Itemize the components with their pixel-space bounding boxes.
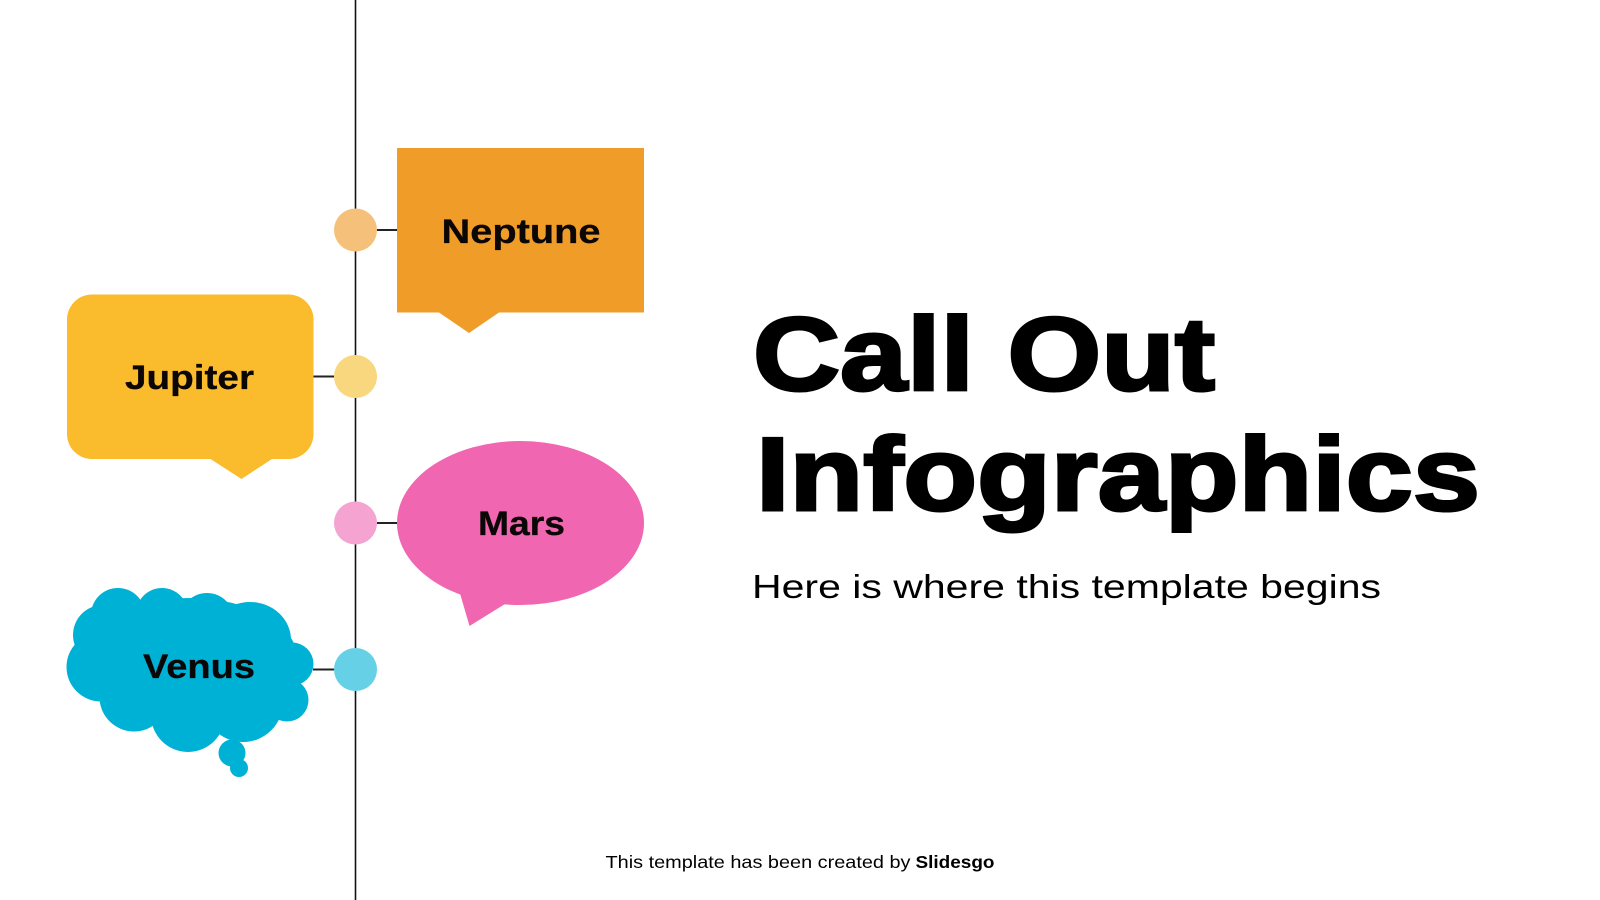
footer credit: This template has been created by (606, 852, 911, 872)
marker dot (334, 648, 377, 691)
cloud speech bubble (66, 588, 314, 777)
title: Infographics (756, 417, 1480, 533)
connector (377, 229, 397, 231)
marker dot (334, 355, 377, 398)
label: Jupiter (125, 359, 254, 397)
label: Neptune (442, 213, 600, 251)
footer credit (606, 852, 994, 872)
callout: Venus (66, 588, 377, 777)
vertical timeline line (354, 0, 356, 900)
label: Venus (143, 648, 255, 686)
title: Call Out (753, 297, 1215, 413)
title (753, 297, 1480, 533)
marker dot (334, 502, 377, 544)
footer credit: Slidesgo (916, 852, 994, 872)
connector (377, 522, 397, 524)
oval speech bubble (397, 441, 644, 626)
marker dot (334, 208, 377, 252)
label: Mars (478, 505, 565, 543)
rounded speech bubble (67, 294, 314, 479)
callout: Mars (334, 441, 644, 626)
subtitle: Here is where this template begins (752, 568, 1381, 605)
callout: Jupiter (67, 294, 377, 479)
connector (313, 668, 335, 670)
rectangular speech bubble (397, 148, 644, 333)
callout: Neptune (334, 148, 644, 333)
connector (313, 376, 335, 378)
